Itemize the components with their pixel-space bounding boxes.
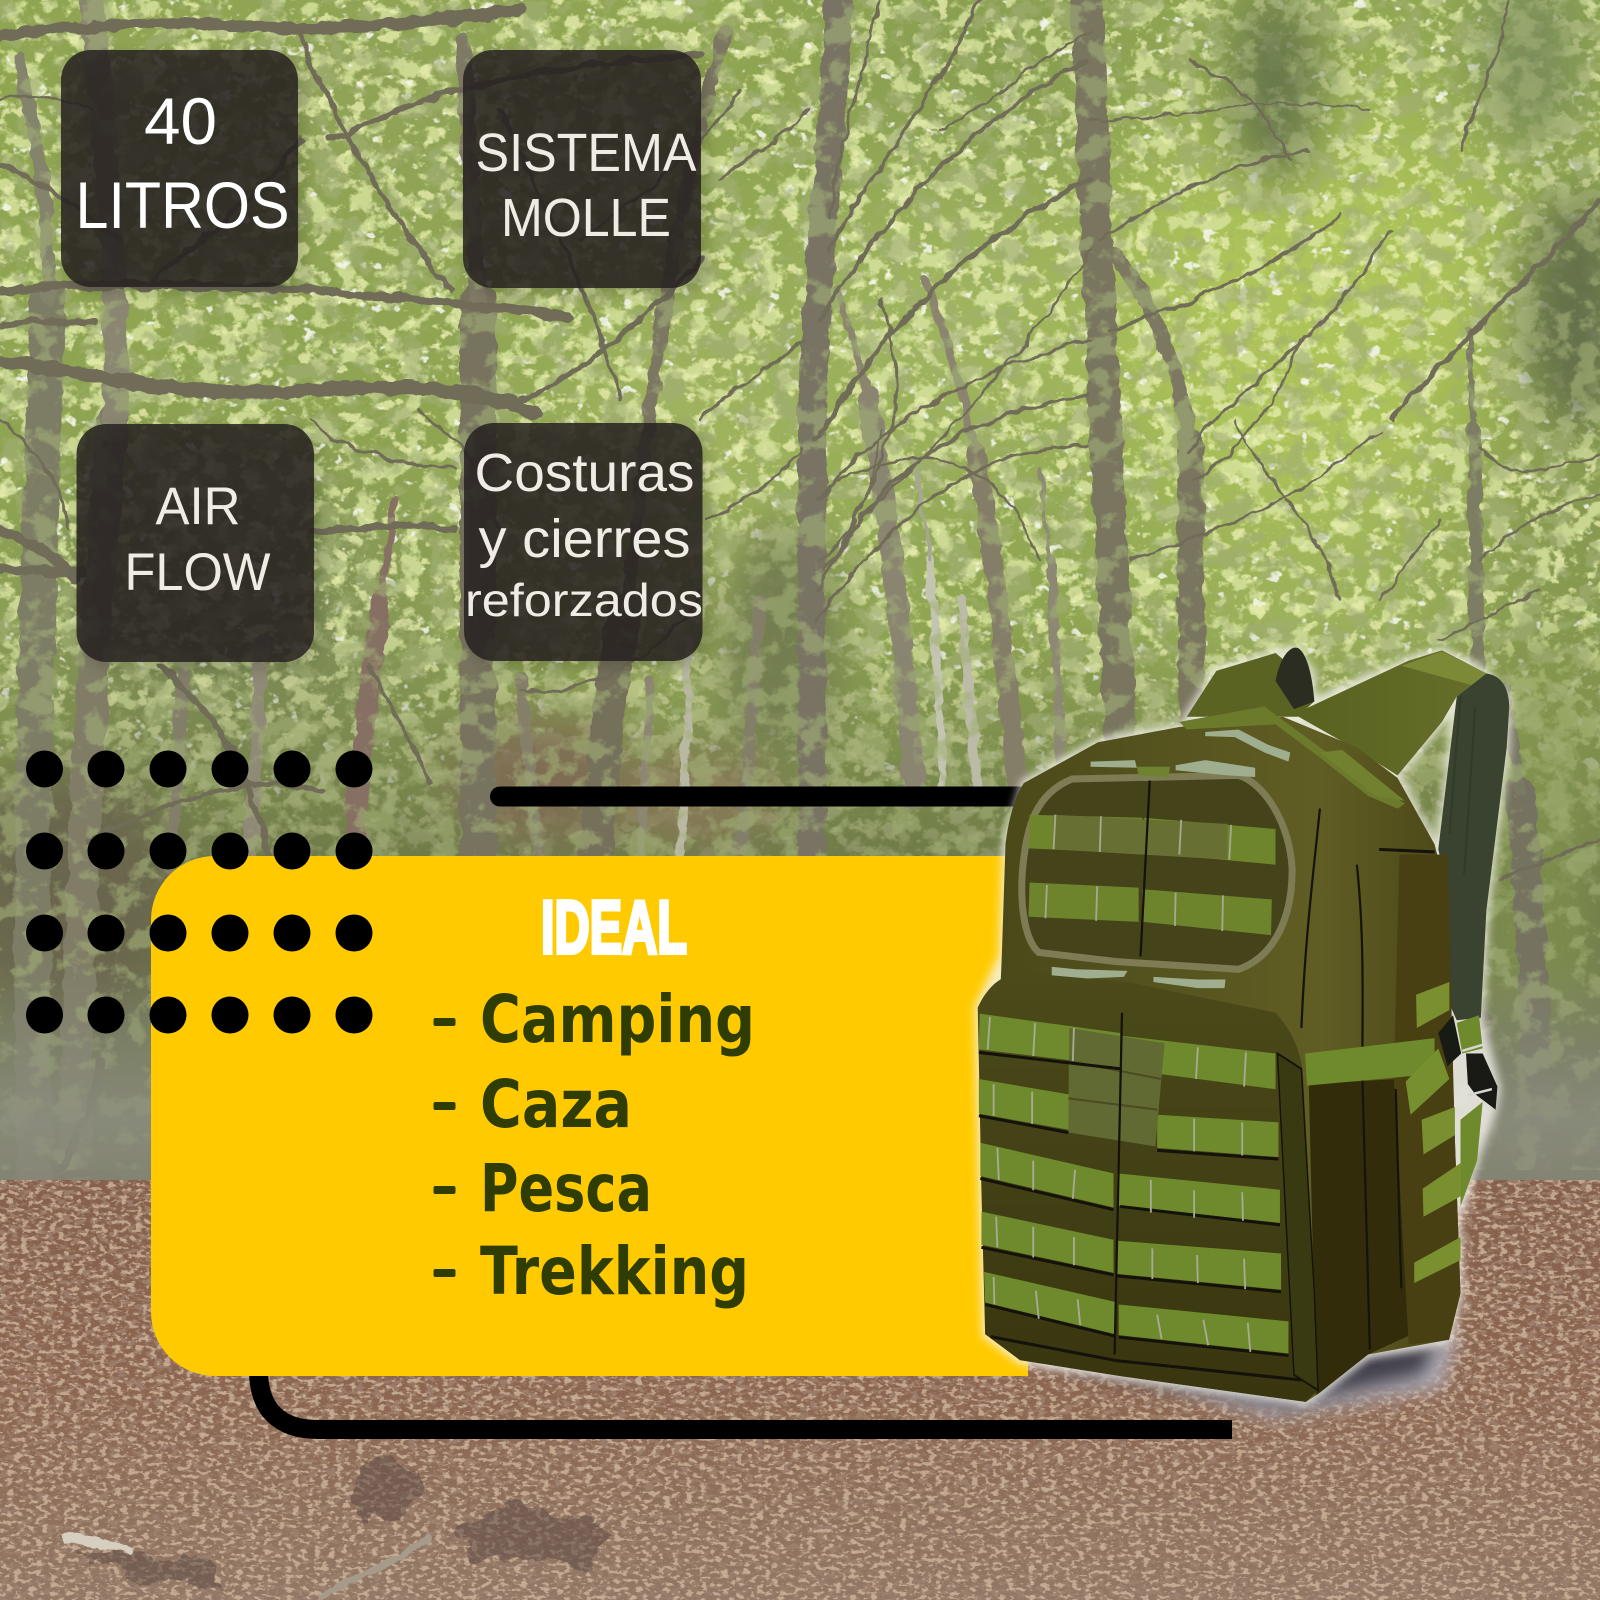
list: activities <box>434 981 755 1310</box>
stitches <box>988 1017 1250 1352</box>
feature card: sistema molle: MOLLE <box>501 188 671 248</box>
feature card: 40 litros <box>61 50 298 287</box>
arrow-like line: top connector <box>500 786 1040 806</box>
branches <box>0 0 1600 1195</box>
backpack shadow <box>1022 1335 1458 1418</box>
feature card: 40 litros: 40 <box>144 84 217 158</box>
trunks <box>20 0 1540 1190</box>
list: activities: Trekking <box>480 1233 749 1310</box>
seams and shadow lines <box>979 1013 1301 1380</box>
backpack halo <box>978 648 1509 1402</box>
feature card: sistema molle: SISTEMA <box>476 123 696 183</box>
feature card: costuras y cierres reforzados: Costuras <box>474 443 694 503</box>
feature card: air flow: FLOW <box>124 543 270 602</box>
side webbing <box>1414 982 1460 1283</box>
arrow-like line: bottom connector <box>258 1370 1232 1430</box>
zipper pulls <box>1052 729 1290 988</box>
top handle <box>1179 707 1405 809</box>
feature card: costuras y cierres reforzados: y cierres <box>478 509 690 569</box>
feature card: costuras y cierres reforzados: reforzados <box>465 574 703 626</box>
heading: ideal: IDEAL <box>541 885 687 969</box>
illustration: tactical backpack <box>978 648 1509 1402</box>
background: forest photograph <box>0 0 1600 1195</box>
right shoulder strap <box>1294 650 1509 1020</box>
left shoulder loop <box>1187 648 1314 717</box>
panel: ideal uses <box>151 856 1028 1376</box>
molle webbing rows <box>979 1014 1288 1353</box>
top pocket <box>1022 775 1292 969</box>
feature card: costuras y cierres reforzados <box>464 423 703 661</box>
feature card: air flow: AIR <box>156 477 240 536</box>
side strap and buckle <box>1305 1015 1497 1207</box>
feature card: air flow <box>76 424 314 662</box>
front pocket <box>978 973 1318 1402</box>
feature card: 40 litros: LITROS <box>76 168 290 242</box>
list: activities: Camping <box>480 981 755 1058</box>
backpack body <box>985 717 1460 1402</box>
list: activities: Caza <box>480 1066 632 1143</box>
velcro patch <box>1068 1028 1165 1146</box>
list: activities: Pesca <box>480 1150 652 1227</box>
decorative dot grid <box>26 750 372 1034</box>
feature card: sistema molle <box>463 50 701 288</box>
background: leaf-litter forest floor <box>0 1180 1600 1600</box>
